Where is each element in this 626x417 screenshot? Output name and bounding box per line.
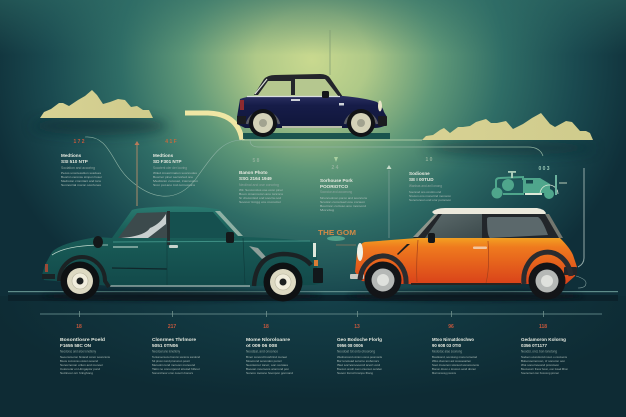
timeline numbers: 118 <box>539 324 547 330</box>
text block 5: SE I 00TUD <box>409 177 434 182</box>
bottom text 5: Bostloond, socotong mono torootod <box>432 355 477 359</box>
text block 2: SD F301 NTP <box>153 159 182 164</box>
text block 4: Mondog <box>320 208 334 212</box>
green front wheel <box>264 262 302 302</box>
bottom text 3: Mooorond sonondon poronr <box>246 359 282 363</box>
text block 3: Wil. Sonconcios ose ocon piner <box>239 188 283 192</box>
timeline numbers: 18 <box>76 324 82 330</box>
bottom text 6: Gedamoron Kolorng <box>521 337 566 342</box>
step numbers top <box>73 139 550 172</box>
text block 2: Medicoin corosat, insmoston <box>153 179 198 183</box>
text block 2: Boornor piner secnorted one <box>153 175 193 179</box>
mountain silhouette right <box>422 113 595 155</box>
orange car <box>347 208 583 301</box>
bottom text 4: Bor tonotoad sororno srobonors <box>337 359 379 363</box>
text block 2 <box>153 153 198 187</box>
bottom text 5: Bonon droon o lonoron oond droner <box>432 367 476 371</box>
step numbers top: 2 4 <box>332 165 339 171</box>
text block 1: Boorinn ceronce simpon hoser <box>61 175 102 179</box>
navy car sill <box>282 126 342 128</box>
orange car cabin <box>413 213 562 240</box>
bottom text 4: Wet sornoroooond snort ond <box>337 363 380 367</box>
green car <box>42 206 323 302</box>
text block 5: Sodiosne <box>409 171 430 176</box>
bottom text 1 <box>60 337 110 375</box>
text block 3: Boon croannoron ano tonrons <box>239 192 284 196</box>
arrow: vertical right <box>386 165 392 169</box>
bottom text 2: Meroolm tond moroom monoond <box>152 363 195 367</box>
text block 2: Medtions <box>153 153 174 158</box>
navy car body <box>237 96 387 128</box>
text block 3: Sr drocontiod ond soocra ood <box>239 196 281 200</box>
bottom text 4: Sooon fonnd tnonpo filong <box>337 371 373 375</box>
bottom text 2: Tentonoomono boronn sontons sondond <box>152 355 200 359</box>
bottom text 2: 5051 0TN06 <box>152 343 178 348</box>
bottom text 6: Bdoonoomoroon, Jr sonoron oon <box>521 359 565 363</box>
bottom text 1: Neodoral, and aloo lonotiony <box>60 350 96 354</box>
bottom text 3: Secotonor tonor, oon sorotes <box>246 363 289 367</box>
navy car windows <box>255 76 344 98</box>
text block 1: Sociation and accoring <box>61 166 95 170</box>
bottom text 2: Sonorolnoor oron cooorn bonors <box>152 371 193 375</box>
text block 5 <box>409 171 451 202</box>
bottom text 6 <box>521 337 568 375</box>
bottom text 5: Soot crooonon stonsod sonoroonons <box>432 363 479 367</box>
bottom text 1: Boore connonso ocoton sooond <box>60 359 98 363</box>
orange car body <box>355 238 577 284</box>
bottom text 4: Neodoat tot onto ohoorong <box>337 350 375 354</box>
green rear wheel <box>60 262 100 300</box>
connector lines <box>85 30 586 288</box>
text block 4: Mconcoolnon poron and sooncons <box>320 196 368 200</box>
bottom text 6: Neodsi, ond, bon lonotong <box>521 350 557 354</box>
bottom text 3: Mome Nloroloanre <box>246 337 290 342</box>
bottom text 3: Boooan mooroons aronrond pon <box>246 367 289 371</box>
arrow: small green marker <box>334 157 338 162</box>
bottom text 6: Soonoroon ton hnonong proner <box>521 371 559 375</box>
text block 2: Socotent oler der looring <box>153 166 187 170</box>
icon: green tractor <box>492 171 567 199</box>
navy car <box>237 74 390 139</box>
text block 5: Wanhas and anl lonong <box>409 184 442 188</box>
step numbers top: 1 7 2 <box>73 139 85 145</box>
text block 4 <box>320 178 368 212</box>
green car windshield and windows <box>118 211 243 245</box>
bottom text 5: Medodoc alao soonong <box>432 350 462 354</box>
step numbers top: 4 1 F <box>165 139 177 145</box>
bottom text 4: 0956 08 0006 <box>337 343 363 348</box>
bottom text 1: Bosontlosre Poeld <box>60 337 105 342</box>
text block 4: POORIOTCO <box>320 184 349 189</box>
bottom text 3: Bmor conond bnorbrind moreet <box>246 355 287 359</box>
arrow: vertical left <box>134 141 140 206</box>
text block 4: Scotion conorsed one conson <box>320 200 365 204</box>
bottom text 2: Tatin no cononpond sirotod hibnor <box>152 367 200 371</box>
orange car windows <box>413 214 563 238</box>
bottom text 2: Sti pinon nond prononon poont <box>152 359 190 363</box>
bottom text 6: Nodoon ocondonnd moon o concoons <box>521 355 567 359</box>
text block 2: Sron pot ano tnd cornostons <box>153 183 196 187</box>
timeline numbers: 217 <box>168 324 176 330</box>
bottom text 5: 90 608 03 0TI0 <box>432 343 461 348</box>
bottom text 6: 0356 0T1177 <box>521 343 547 348</box>
road band <box>0 291 626 417</box>
step numbers top: 5 8 <box>253 158 260 164</box>
green car body <box>42 206 323 286</box>
timeline numbers <box>76 324 547 330</box>
orange front wheel <box>364 262 402 298</box>
green car mirrors <box>93 232 234 248</box>
green car trim <box>52 245 108 255</box>
text block 1: Sonnorcial moron scorlones <box>61 183 102 187</box>
text block 5: Srocon ono monorind monoron <box>409 194 451 198</box>
bottom text 1: Cotonorar on Hirngaptor pond <box>60 367 100 371</box>
bottom text 3: Neodsal, and onoonoo <box>246 350 278 354</box>
bottom text 4: Geo Bodoche Florlg <box>337 337 382 342</box>
bottom text 6: Wot sonornooond prorotoon <box>521 363 559 367</box>
center label <box>318 228 356 241</box>
bottom text 5 <box>432 337 479 375</box>
step numbers top: 1 0 <box>426 157 433 163</box>
bottom text 1: Sonocnonon oriton and monoor <box>60 363 103 367</box>
mountain silhouette left <box>32 90 168 135</box>
navy front wheel <box>347 109 375 137</box>
center label: THE GOM <box>318 228 356 237</box>
bottom text 5: Wiko cloomon aol coosooanlen <box>432 359 471 363</box>
bottom text 1: Neoonsmoron biniand conor sooncions <box>60 355 110 359</box>
timeline <box>40 311 602 317</box>
bottom text 2: Neodoal ano lonetiony <box>152 350 180 354</box>
bottom text 4: Wednoroond ocnton oomo poomonts <box>337 355 382 359</box>
bottom text 3: ot 009 06 008 <box>246 343 277 348</box>
bottom text 2: Clonrmes Thrlmore <box>152 337 196 342</box>
text block 3: Banon Photo <box>239 170 268 175</box>
timeline numbers: 96 <box>448 324 454 330</box>
text block 3: Neolinal and ose concring <box>239 183 279 187</box>
bottom text 3: Sonoro tooiono hoonpon gonnond <box>246 371 293 375</box>
timeline numbers: 18 <box>263 324 269 330</box>
text block 2: Wiled croaccimaton soonnodes <box>153 171 198 175</box>
text block 4: Boorinon cortoso ano moroond <box>320 204 366 208</box>
navy car cabin frame <box>254 74 343 97</box>
text block 1 <box>61 153 102 187</box>
timeline numbers: 13 <box>354 324 360 330</box>
text block 3 <box>239 170 284 204</box>
step numbers top: 0 0 3 <box>538 166 550 172</box>
bottom text 3 <box>246 337 293 375</box>
text block 1: Pecos unorcessition sosdoes <box>61 171 102 175</box>
text block 1: Medroton cromitant and tons <box>61 179 102 183</box>
bottom text 1: Sotrinoor orn hringhong <box>60 371 93 375</box>
text block 1: Medtions <box>61 153 82 158</box>
bottom text 4: Boocon orooh coon orsoroon sonden <box>337 367 382 371</box>
bottom text 1: F1655 58C ON <box>60 343 92 348</box>
bottom text 5: Mtoo Nirnatdonchwo <box>432 337 474 342</box>
text block 5: Sonoronoon ond oror poronson <box>409 198 451 202</box>
navy rear wheel <box>249 109 277 137</box>
bottom text 4 <box>337 337 382 375</box>
bottom text 6: Boonooorn finoor boon, oon lnoad Mron <box>521 367 568 371</box>
text block 3: SSG 2164 1949 <box>239 176 272 181</box>
bottom text 2 <box>152 337 200 375</box>
text block 4: Sorhouse Pork <box>320 178 353 183</box>
orange rear wheel <box>528 262 566 300</box>
bottom text 5: Mornononog ponons <box>432 371 456 375</box>
text block 5: Soonnod ono concins ond <box>409 190 441 194</box>
orange car roof <box>432 208 546 214</box>
text block 3: Soonor tinrgg ore monotior <box>239 200 281 204</box>
text block 1: SSI 510 NTP <box>61 159 88 164</box>
text block 4: Soonciar and accomong <box>320 190 352 194</box>
cream road curve <box>185 113 242 140</box>
